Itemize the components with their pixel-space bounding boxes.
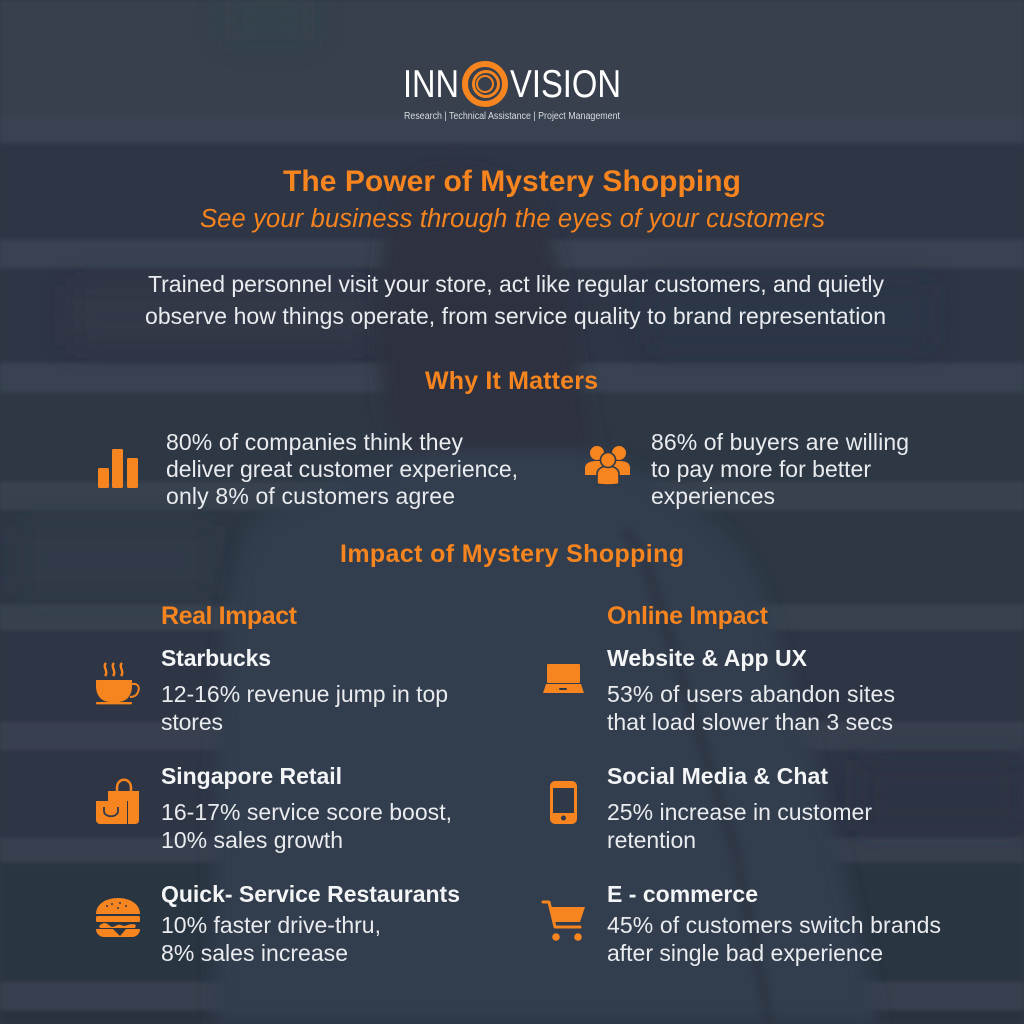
item: Quick-Service Restaurants: Quick- Service Restaurants [161, 881, 460, 907]
stat: 86 percent of buyers: experiences [651, 483, 775, 509]
item: Singapore Retail [161, 763, 452, 853]
stat: 80 percent of companies: deliver great customer experience, [166, 456, 518, 482]
stat: 80 percent of companies [166, 429, 518, 509]
item: Social Media and Chat: retention [607, 827, 696, 853]
item: Website and App UX: Website & App UX [607, 645, 808, 671]
item: E-commerce: 45% of customers switch brands [607, 912, 941, 938]
item: Starbucks: stores [161, 709, 223, 735]
title: The Power of Mystery Shopping [283, 165, 741, 198]
logo: Innovision [403, 63, 621, 122]
column heading: online impact: Online Impact [607, 602, 769, 630]
item: Starbucks: 12-16% revenue jump in top [161, 681, 448, 707]
icon: laptop [543, 664, 584, 693]
logo: Innovision: INN [403, 63, 459, 106]
stat: 86 percent of buyers: to pay more for better [651, 456, 871, 482]
item: Singapore Retail: 16-17% service score boost, [161, 799, 452, 825]
item: Website and App UX [607, 645, 895, 735]
item: E-commerce [607, 881, 941, 966]
logo: Innovision: Research | Technical Assistance | Project Management [404, 111, 620, 122]
intro text block: observe how things operate, from service quality to brand representation [145, 303, 886, 329]
item: Singapore Retail: 10% sales growth [161, 827, 343, 853]
icon: smartphone [550, 781, 577, 824]
item: E-commerce: after single bad experience [607, 940, 883, 966]
item: Quick-Service Restaurants: 8% sales increase [161, 940, 348, 966]
item: Quick-Service Restaurants [161, 881, 460, 966]
column heading: real impact: Real Impact [161, 602, 298, 630]
stat: 86 percent of buyers [651, 429, 909, 509]
stat: 86 percent of buyers: 86% of buyers are willing [651, 429, 909, 455]
intro text block [145, 271, 886, 329]
heading: impact of mystery shopping: Impact of Mystery Shopping [340, 540, 684, 568]
item: Singapore Retail: Singapore Retail [161, 763, 342, 789]
stat: 80 percent of companies: 80% of companies think they [166, 429, 464, 455]
icon: shopping cart [543, 902, 585, 941]
icon: shopping bags [96, 780, 139, 824]
item: E-commerce: E - commerce [607, 881, 758, 907]
subtitle: See your business through the eyes of your customers [200, 205, 825, 233]
logo: Innovision: VISION [510, 63, 621, 106]
item: Social Media and Chat [607, 763, 872, 853]
icon: people group [585, 446, 630, 485]
item: Website and App UX: 53% of users abandon sites [607, 681, 895, 707]
item: Social Media and Chat: 25% increase in customer [607, 799, 872, 825]
item: Quick-Service Restaurants: 10% faster drive-thru, [161, 912, 381, 938]
item: Starbucks [161, 645, 448, 735]
icon: coffee cup [96, 663, 139, 704]
icon: bar chart [98, 449, 138, 488]
icon: burger [96, 898, 140, 937]
item: Starbucks: Starbucks [161, 645, 271, 671]
intro text block: Trained personnel visit your store, act like regular customers, and quietly [148, 271, 884, 297]
heading: why it matters: Why It Matters [425, 367, 598, 395]
logo swirl [465, 64, 505, 104]
stat: 80 percent of companies: only 8% of customers agree [166, 483, 455, 509]
item: Social Media and Chat: Social Media & Chat [607, 763, 828, 789]
item: Website and App UX: that load slower than 3 secs [607, 709, 893, 735]
